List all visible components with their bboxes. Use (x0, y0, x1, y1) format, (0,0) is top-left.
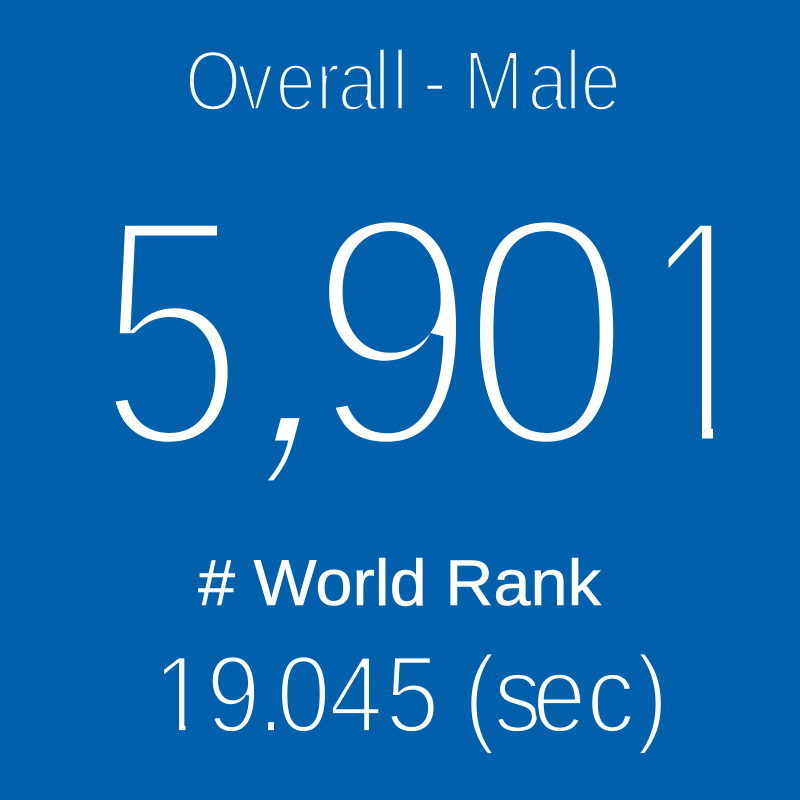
big number: 0 (461, 147, 632, 516)
time value: 19.045 (sec) (153, 632, 668, 755)
title: Overall - Male (185, 33, 621, 128)
big number: 5 (98, 147, 245, 517)
label: world rank: # World Rank (198, 546, 602, 619)
big number: 9 (308, 147, 477, 517)
big number: , (221, 165, 401, 513)
big number: 1 (643, 147, 763, 517)
big number (98, 147, 775, 517)
